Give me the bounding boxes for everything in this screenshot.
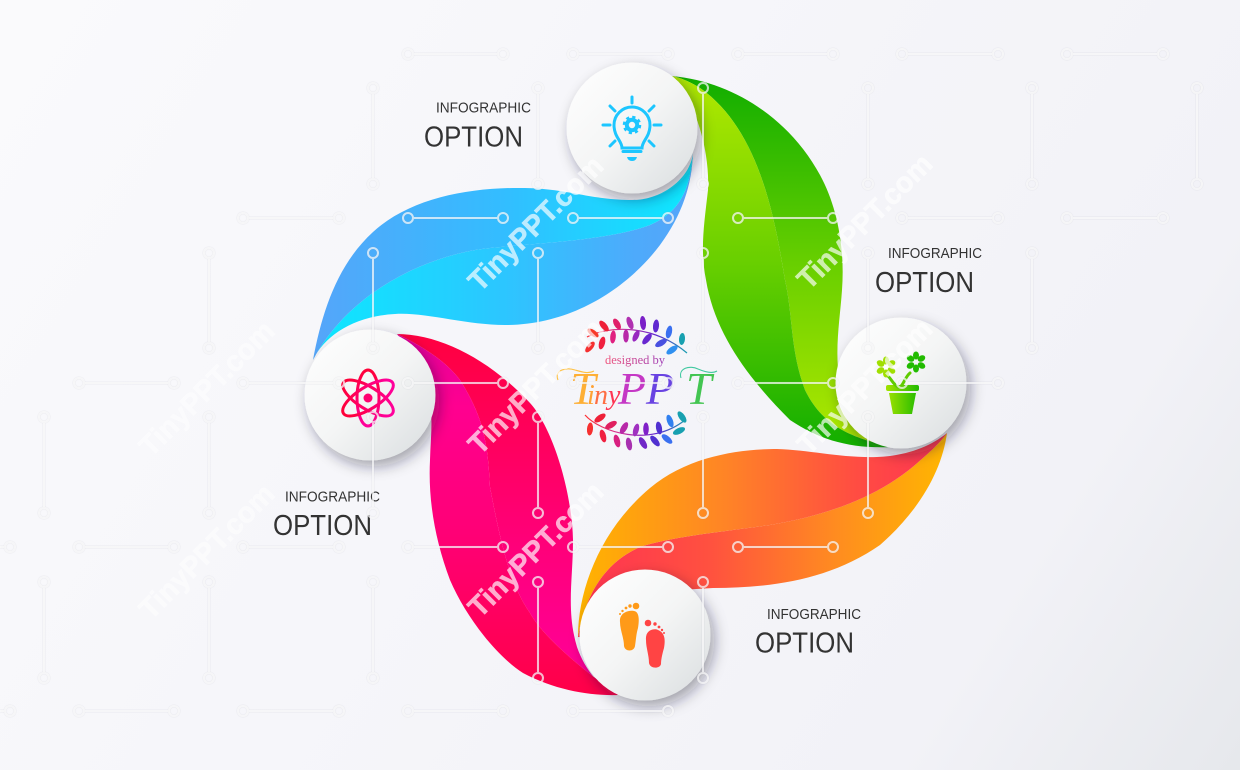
watermarks: TinyPPT.com [791, 313, 939, 461]
blue leaf [313, 153, 693, 360]
right flower [906, 352, 926, 372]
icon: light bulb with gear [603, 97, 661, 161]
TinyPPT script wordmark: P [617, 363, 646, 414]
label: right option: OPTION [875, 267, 974, 299]
watermarks: TinyPPT.com [462, 476, 610, 624]
orange leaf upper ribbon [578, 433, 947, 637]
logo: designed by TinyPPT [557, 316, 717, 451]
label: top option: OPTION [424, 122, 523, 154]
TinyPPT script wordmark: n [594, 380, 608, 411]
label: bottom option: OPTION [755, 628, 854, 660]
green leaf inner ribbon [672, 76, 893, 447]
label: left option: INFOGRAPHIC [285, 488, 380, 506]
T crossbar flourishes [557, 369, 594, 380]
TinyPPT script wordmark: y [605, 380, 621, 411]
label: top option [424, 100, 531, 154]
TinyPPT script wordmark: i [587, 380, 595, 411]
designed by text: designed by [605, 352, 665, 367]
left flower [876, 356, 896, 378]
watermarks: TinyPPT.com [791, 148, 939, 296]
pink leaf outer ribbon [397, 334, 618, 695]
label: bottom option: INFOGRAPHIC [767, 606, 861, 623]
label: left option [273, 488, 380, 542]
icon: potted plant [876, 352, 926, 414]
right foot [645, 620, 665, 668]
watermarks: TinyPPT.com [133, 315, 281, 463]
circle: feet [580, 570, 710, 700]
watermarks [133, 148, 939, 626]
blue leaf lower ribbon [313, 153, 693, 360]
watermarks: TinyPPT.com [133, 478, 281, 626]
watermarks: TinyPPT.com [462, 150, 610, 298]
pot [886, 385, 919, 414]
left foot [619, 603, 639, 650]
lower wreath [585, 410, 688, 451]
green leaf outer ribbon [672, 76, 893, 447]
pink leaf inner ribbon [397, 334, 618, 695]
upper wreath [584, 316, 687, 356]
blue leaf upper ribbon [313, 153, 693, 360]
TinyPPT script wordmark: P [645, 363, 674, 414]
label: top option: INFOGRAPHIC [436, 100, 531, 116]
pink leaf [397, 334, 618, 695]
watermarks: TinyPPT.com [462, 313, 610, 461]
circle: atom [304, 330, 436, 460]
circle: bulb [566, 62, 698, 194]
orange leaf [578, 433, 947, 640]
circle: plant [836, 318, 966, 448]
icon: footprints [619, 603, 665, 668]
label: bottom option [755, 606, 861, 660]
icon: atom [338, 370, 398, 426]
green leaf [672, 76, 893, 447]
stems [888, 373, 910, 387]
TinyPPT script wordmark: T [686, 363, 715, 414]
TinyPPT script wordmark: T [570, 363, 599, 414]
label: left option: OPTION [273, 510, 372, 542]
label: right option [875, 245, 982, 299]
label: right option: INFOGRAPHIC [888, 245, 982, 262]
orange leaf lower ribbon [578, 433, 947, 640]
